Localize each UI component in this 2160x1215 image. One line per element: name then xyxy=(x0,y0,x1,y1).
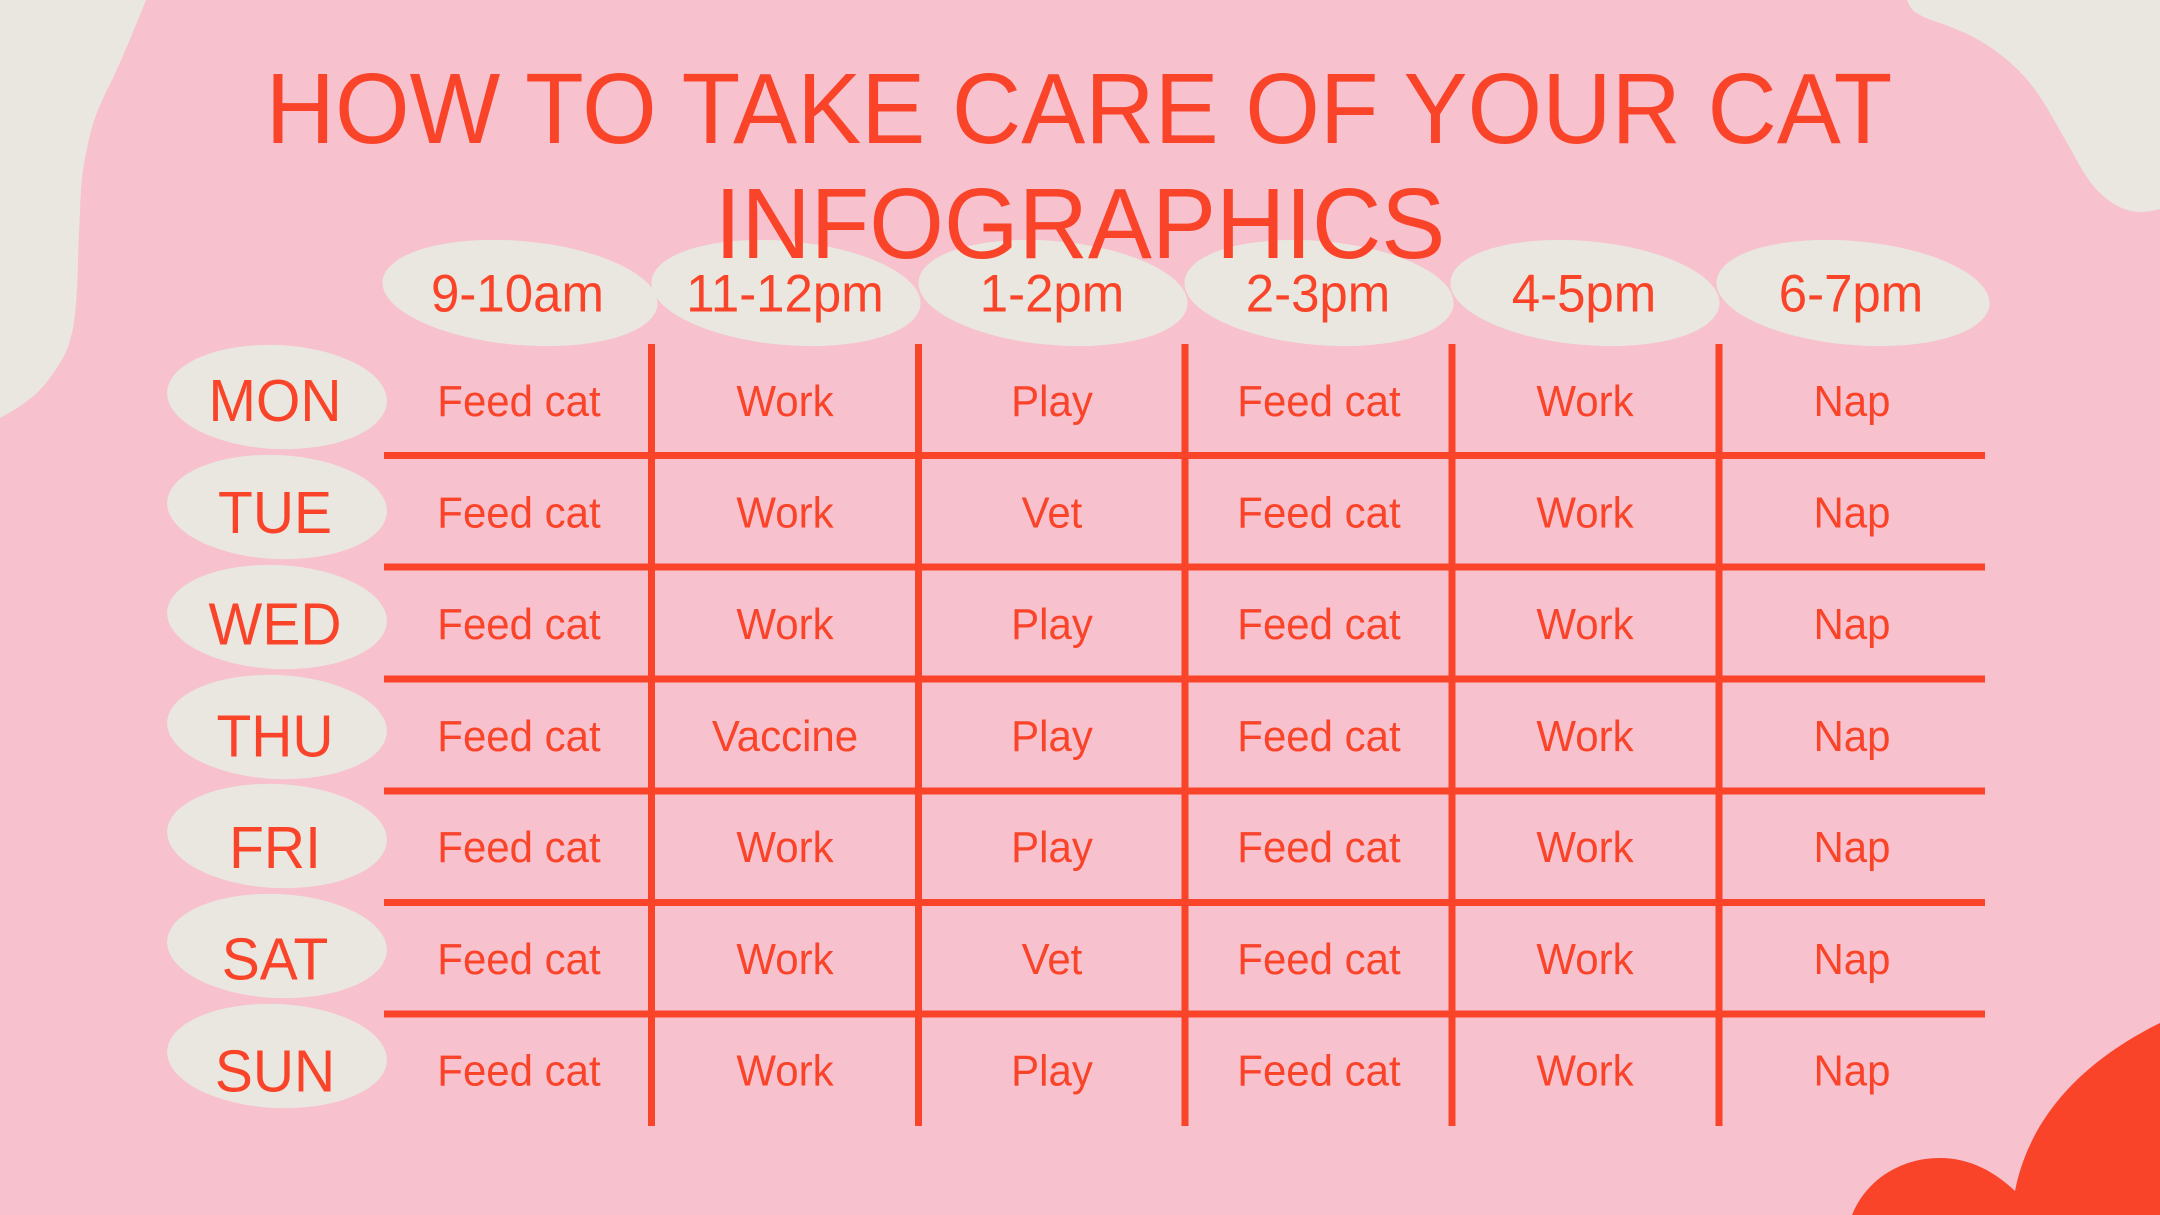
row: TUE: Work xyxy=(736,489,834,538)
row: MON: Nap xyxy=(1813,377,1891,426)
row: THU xyxy=(437,712,1891,761)
day: TUE xyxy=(165,450,389,564)
row: TUE: Nap xyxy=(1813,489,1891,538)
row: FRI: Feed cat xyxy=(1237,823,1401,872)
row: MON xyxy=(437,377,1891,426)
row: WED xyxy=(437,600,1891,649)
row: THU: Feed cat xyxy=(1237,712,1401,761)
row: MON: Feed cat xyxy=(1237,377,1401,426)
row: SAT: Vet xyxy=(1022,935,1082,984)
row: WED: Work xyxy=(736,600,834,649)
time slot: 4-5pm xyxy=(1446,229,1724,357)
row: SUN: Work xyxy=(736,1047,834,1096)
day: THU: THU xyxy=(216,703,334,770)
title: INFOGRAPHICS xyxy=(715,167,1445,279)
row: SUN: Play xyxy=(1011,1047,1093,1096)
day: SAT xyxy=(165,889,389,1003)
row: THU: Vaccine xyxy=(712,712,858,761)
row: THU: Play xyxy=(1011,712,1093,761)
row: SAT: Work xyxy=(736,935,834,984)
row: TUE: Vet xyxy=(1022,489,1082,538)
row: MON: Work xyxy=(736,377,834,426)
row: SUN xyxy=(437,1047,1891,1096)
day: SUN xyxy=(165,999,389,1113)
day: THU xyxy=(165,670,389,784)
day: SUN: SUN xyxy=(215,1038,335,1105)
time slot: 1-2pm: 1-2pm xyxy=(980,264,1124,324)
row: SUN: Feed cat xyxy=(437,1047,601,1096)
schedule table cells xyxy=(437,377,1891,1096)
row: SAT: Feed cat xyxy=(437,935,601,984)
row: SAT: Feed cat xyxy=(1237,935,1401,984)
row: SAT xyxy=(437,935,1891,984)
row: SUN: Work xyxy=(1536,1047,1634,1096)
row: FRI xyxy=(437,823,1891,872)
row: TUE: Feed cat xyxy=(437,489,601,538)
table grid lines xyxy=(384,344,1985,1126)
time slot: 11-12pm xyxy=(647,229,925,357)
row: WED: Play xyxy=(1011,600,1093,649)
day: TUE: TUE xyxy=(218,480,332,546)
day: WED: WED xyxy=(209,591,341,658)
decorative blob: top right xyxy=(1907,0,2160,212)
row: FRI: Work xyxy=(736,823,834,872)
row: FRI: Work xyxy=(1536,823,1634,872)
row: THU: Nap xyxy=(1813,712,1891,761)
time slot: 6-7pm xyxy=(1712,229,1994,357)
time slot: 9-10am xyxy=(378,229,662,357)
row: FRI: Nap xyxy=(1813,823,1891,872)
time slot: 4-5pm: 4-5pm xyxy=(1512,264,1656,324)
row: SAT: Nap xyxy=(1813,935,1891,984)
decorative blob: bottom right xyxy=(1852,1023,2160,1215)
row: FRI: Play xyxy=(1011,823,1093,872)
time slot: 9-10am: 9-10am xyxy=(431,264,604,324)
day: MON xyxy=(165,340,389,454)
row: WED: Feed cat xyxy=(437,600,601,649)
row: SUN: Feed cat xyxy=(1237,1047,1401,1096)
time slot: 2-3pm: 2-3pm xyxy=(1246,264,1390,324)
row: SUN: Nap xyxy=(1813,1047,1891,1096)
title xyxy=(266,52,1892,279)
time slot: 1-2pm xyxy=(914,229,1192,357)
time slot: 6-7pm: 6-7pm xyxy=(1779,264,1923,324)
time slot: 11-12pm: 11-12pm xyxy=(686,264,884,324)
row: TUE: Feed cat xyxy=(1237,489,1401,538)
row: TUE xyxy=(437,489,1891,538)
title: HOW TO TAKE CARE OF YOUR CAT xyxy=(266,52,1892,164)
row: MON: Feed cat xyxy=(437,377,601,426)
day labels xyxy=(165,340,389,1113)
row: WED: Feed cat xyxy=(1237,600,1401,649)
row: MON: Work xyxy=(1536,377,1634,426)
day: WED xyxy=(165,560,389,674)
row: TUE: Work xyxy=(1536,489,1634,538)
day: FRI xyxy=(165,779,389,893)
decorative blob: top left xyxy=(0,0,146,418)
row: WED: Work xyxy=(1536,600,1634,649)
day: FRI: FRI xyxy=(229,815,321,881)
row: THU: Work xyxy=(1536,712,1634,761)
row: MON: Play xyxy=(1011,377,1093,426)
row: WED: Nap xyxy=(1813,600,1891,649)
row: SAT: Work xyxy=(1536,935,1634,984)
day: SAT: SAT xyxy=(222,926,328,993)
time slot: 2-3pm xyxy=(1180,229,1458,357)
row: FRI: Feed cat xyxy=(437,823,601,872)
time header ellipses xyxy=(378,229,1994,357)
row: THU: Feed cat xyxy=(437,712,601,761)
day: MON: MON xyxy=(209,368,341,434)
